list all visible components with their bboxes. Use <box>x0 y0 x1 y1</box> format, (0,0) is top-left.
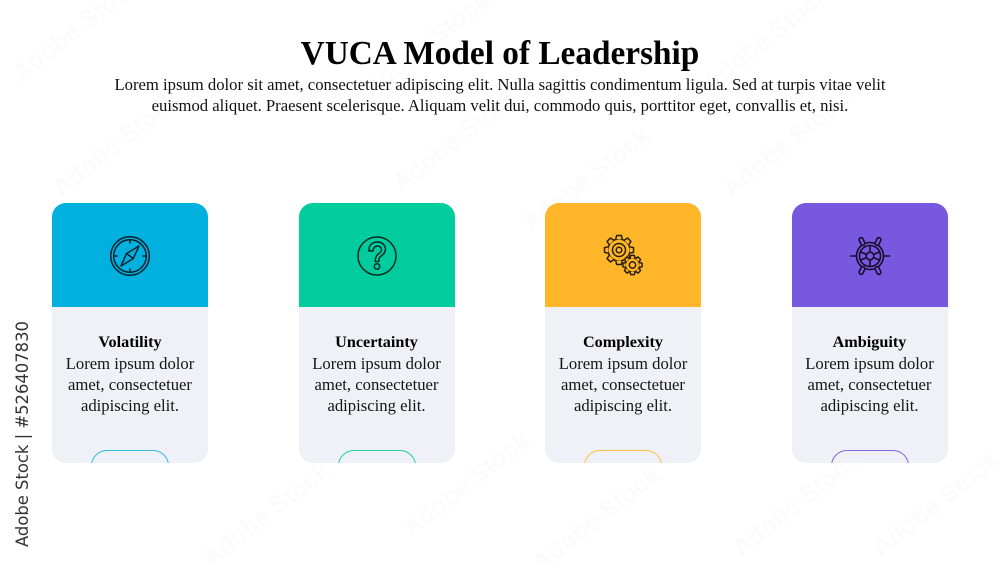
panel: uncertainty <box>298 203 454 463</box>
ambiguity text <box>805 333 934 415</box>
complexity button <box>584 450 662 492</box>
complexity text: Complexity <box>583 333 663 351</box>
uncertainty text <box>312 333 441 415</box>
panel: complexity <box>545 203 701 463</box>
text: Adobe Stock <box>717 86 855 202</box>
text: Adobe Stock <box>397 426 535 542</box>
volatility text: amet, consectetuer <box>68 375 192 394</box>
text: Adobe Stock <box>387 81 525 197</box>
intro text <box>114 75 886 115</box>
uncertainty button <box>338 450 416 492</box>
icon: ship wheel <box>850 236 890 276</box>
ambiguity button <box>830 450 908 492</box>
complexity text: amet, consectetuer <box>561 375 685 394</box>
complexity text <box>559 333 688 415</box>
uncertainty text: amet, consectetuer <box>315 375 438 394</box>
ambiguity text: Ambiguity <box>833 333 906 351</box>
volatility text: Volatility <box>98 333 162 351</box>
volatility text: adipiscing elit. <box>81 396 179 415</box>
stock id label: Adobe Stock | #526407830 <box>13 321 32 547</box>
uncertainty text: adipiscing elit. <box>327 396 426 415</box>
text: Adobe Stock <box>727 446 865 562</box>
intro text: euismod aliquet. Praesent scelerisque. Aliquam velit dui, commodo quis, porttitor eget, convallis et, nisi. <box>152 96 848 115</box>
icon: question mark <box>357 236 397 276</box>
uncertainty header <box>298 203 454 307</box>
icon: gears <box>604 234 643 276</box>
ambiguity text: amet, consectetuer <box>808 375 931 394</box>
handles <box>858 237 865 246</box>
complexity text: Lorem ipsum dolor <box>559 354 687 373</box>
uncertainty text: Lorem ipsum dolor <box>312 354 441 373</box>
ambiguity header <box>792 203 948 307</box>
panel: ambiguity <box>792 203 948 463</box>
volatility text: Lorem ipsum dolor <box>66 354 194 373</box>
text: Adobe Stock <box>517 121 655 237</box>
volatility header <box>52 203 208 307</box>
complexity text: adipiscing elit. <box>574 396 672 415</box>
panel: volatility <box>52 203 208 463</box>
intro text: Lorem ipsum dolor sit amet, consectetuer adipiscing elit. Nulla sagittis condimentum ligula. Sed at turpis vitae velit <box>114 75 886 94</box>
small gear <box>623 255 642 275</box>
volatility text <box>66 333 194 415</box>
volatility button <box>91 450 169 492</box>
ambiguity text: Lorem ipsum dolor <box>805 354 934 373</box>
uncertainty text: Uncertainty <box>335 333 418 351</box>
text: Adobe Stock <box>47 86 185 202</box>
title: VUCA Model of Leadership <box>301 35 699 72</box>
large gear <box>604 236 634 264</box>
complexity header <box>545 203 701 307</box>
ambiguity text: adipiscing elit. <box>820 396 919 415</box>
icon: compass <box>110 236 150 276</box>
